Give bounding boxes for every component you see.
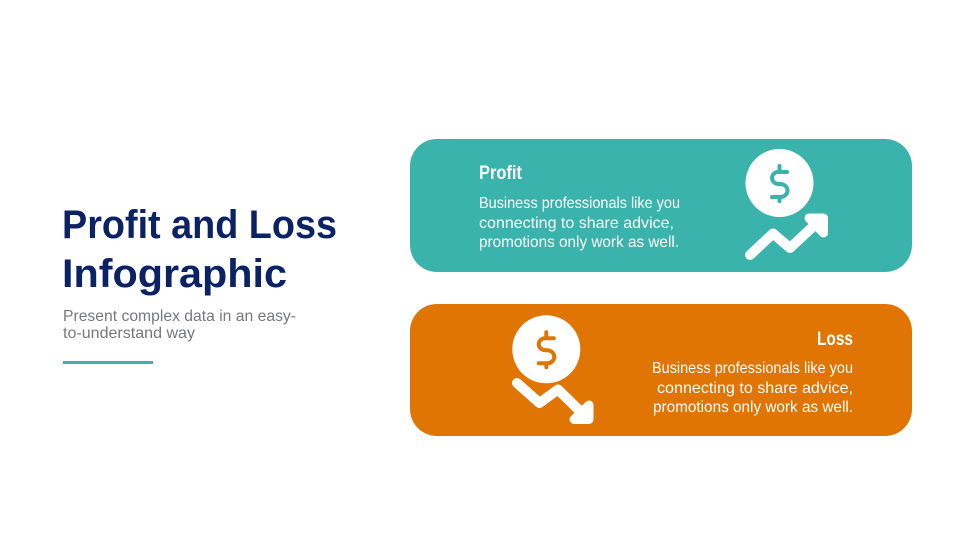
loss body text: [652, 360, 853, 416]
panel: profit: [410, 139, 912, 272]
loss heading: Loss: [817, 329, 853, 350]
profit heading: Profit: [479, 163, 523, 184]
subtitle: to-understand way: [63, 325, 195, 342]
title: [62, 203, 337, 296]
title: Profit and Loss: [62, 203, 337, 247]
profit body text: connecting to share advice,: [479, 215, 674, 232]
loss body text: promotions only work as well.: [653, 399, 853, 416]
subtitle: Present complex data in an easy-: [63, 308, 296, 325]
profit body text: promotions only work as well.: [479, 234, 679, 251]
loss body text: Business professionals like you: [652, 360, 853, 377]
profit body text: [479, 195, 680, 251]
icon: dollar coin with rising arrow: [746, 149, 824, 255]
profit body text: Business professionals like you: [479, 195, 680, 212]
icon: dollar coin with falling arrow: [512, 315, 589, 420]
subtitle: [63, 308, 296, 342]
loss body text: connecting to share advice,: [657, 380, 853, 397]
panel: loss: [410, 304, 912, 436]
accent underline: [63, 361, 153, 364]
title: Infographic: [62, 252, 287, 296]
profit panel background: [410, 139, 912, 272]
loss panel background: [410, 304, 912, 436]
